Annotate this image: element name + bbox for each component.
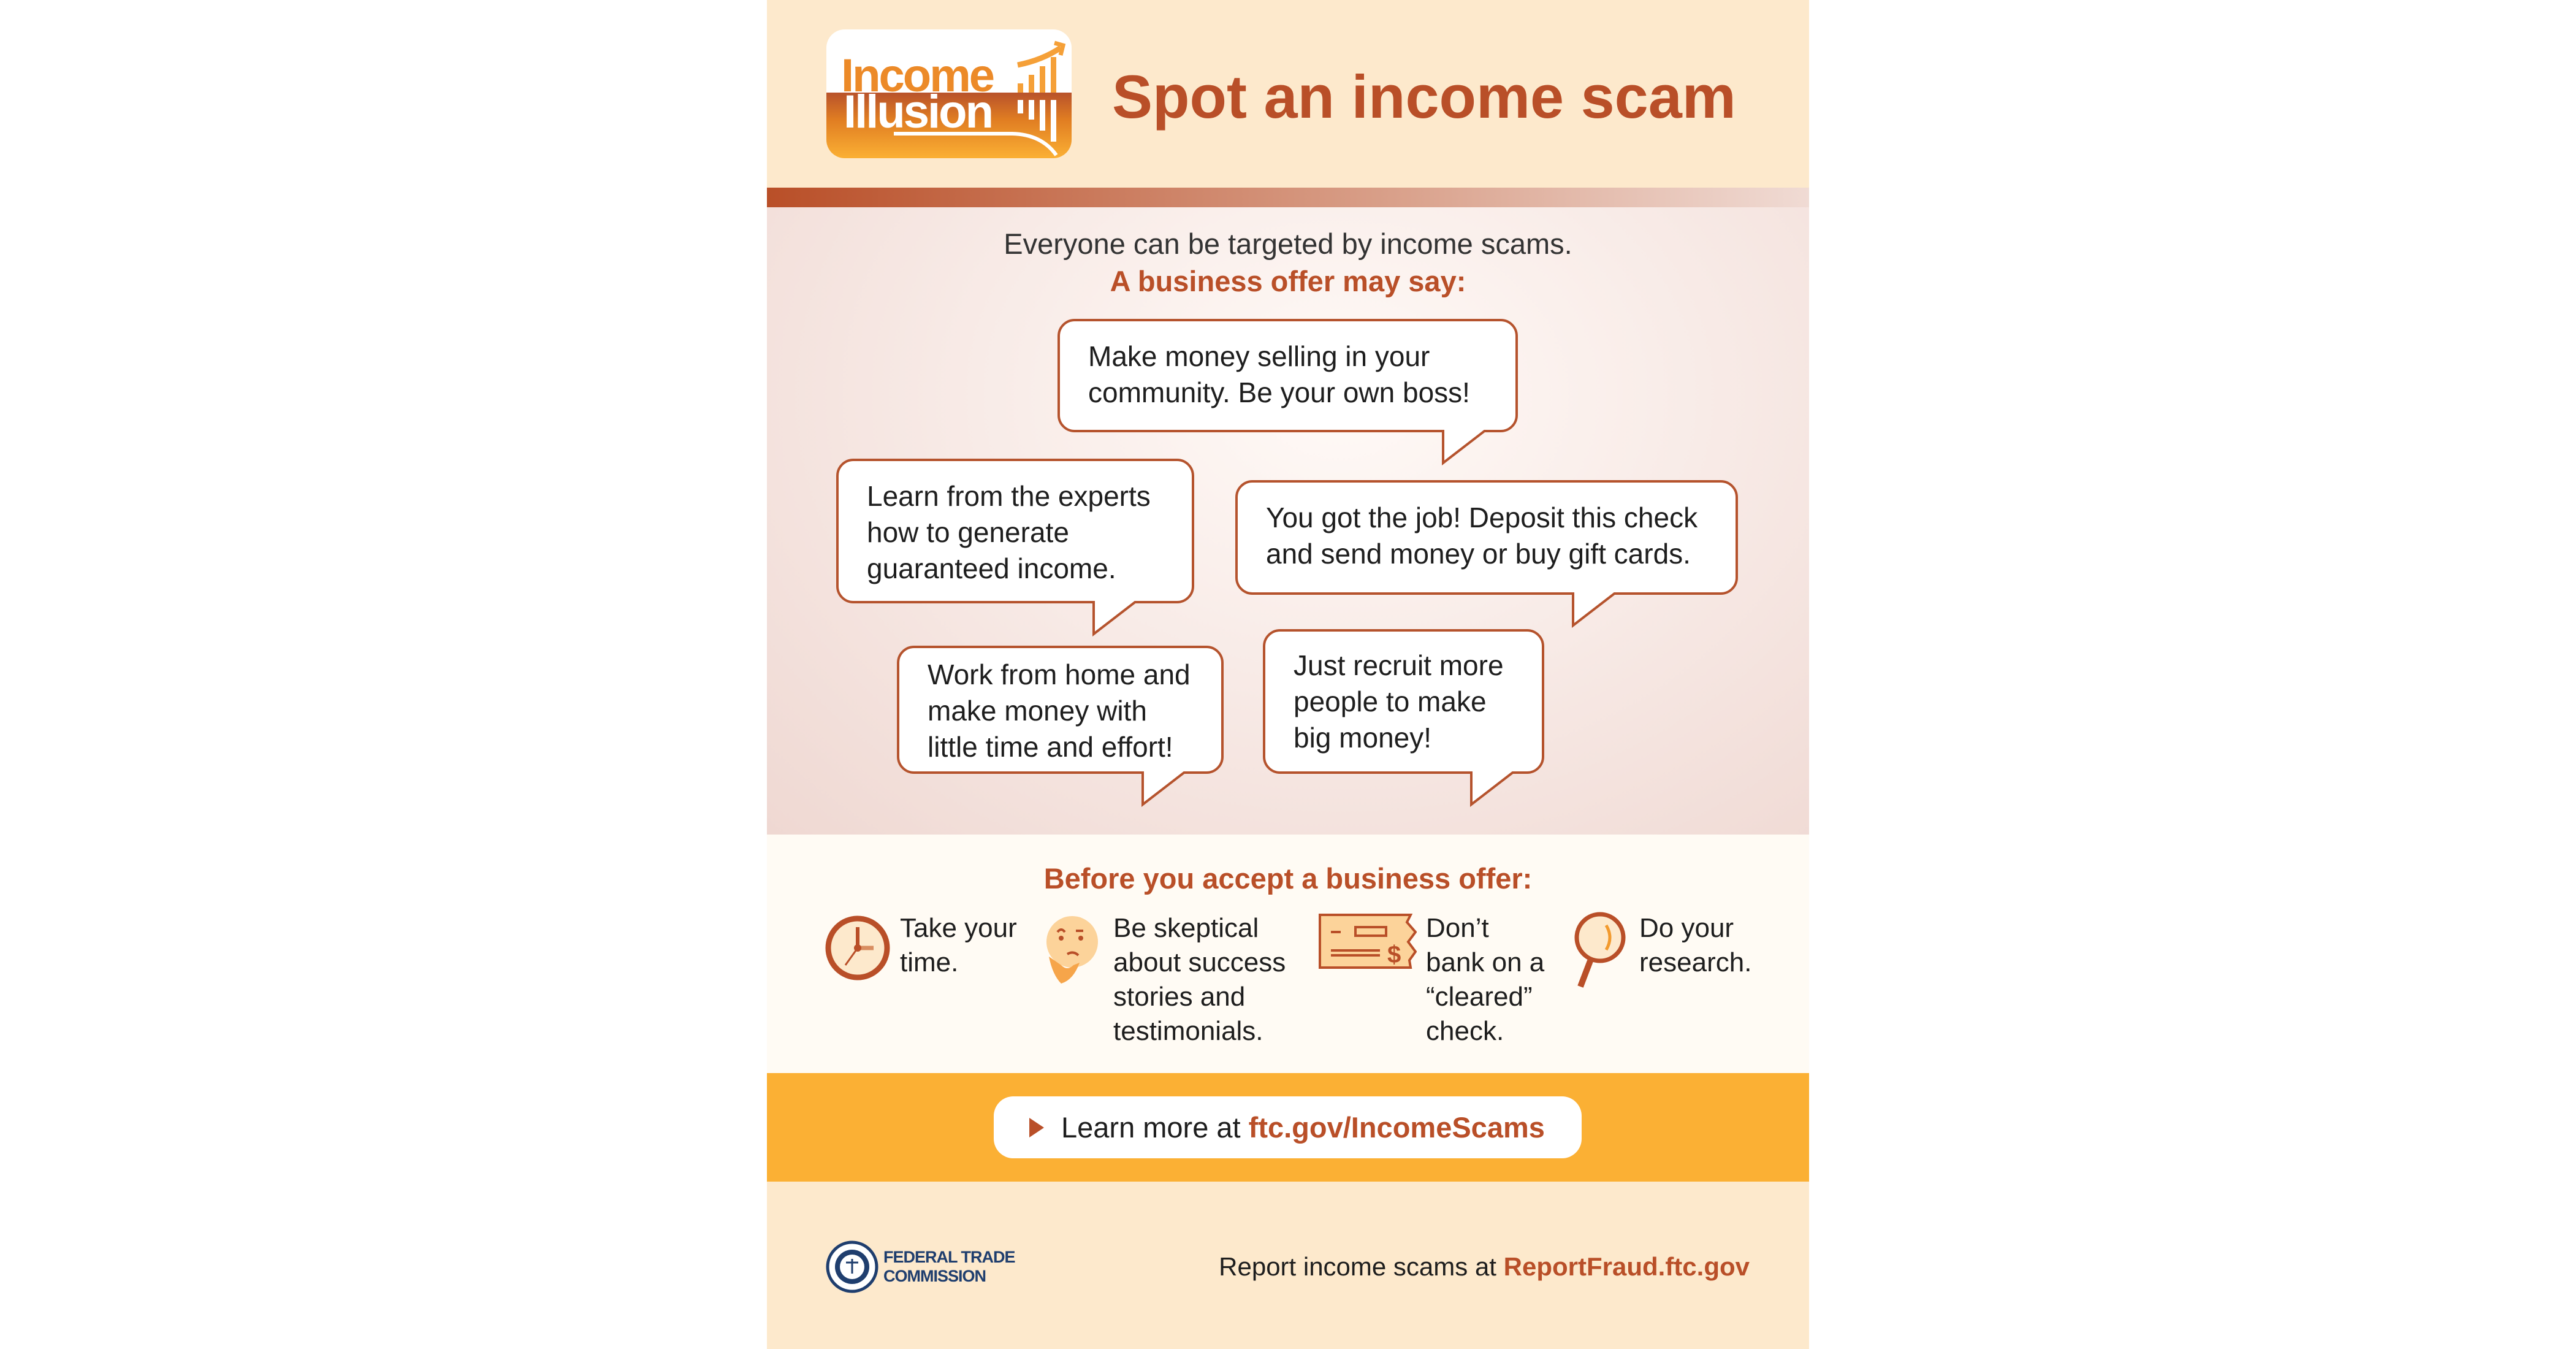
tip 1: time. — [900, 947, 958, 977]
tip 1: Take your — [900, 913, 1017, 943]
icon: magnifier — [1574, 912, 1626, 988]
tip 2: about success — [1113, 947, 1286, 977]
bubble 5: big money! — [1294, 722, 1431, 754]
tip 3: Don’t — [1426, 913, 1489, 943]
tail 1 — [1442, 430, 1485, 465]
icon: thinking face — [1046, 916, 1098, 984]
learn more button: Learn more at ftc.gov/IncomeScams — [1061, 1111, 1545, 1144]
bubble 3: and send money or buy gift cards. — [1266, 538, 1691, 570]
FTC logo: FEDERAL TRADE — [883, 1248, 1015, 1266]
intro text: A business offer may say: — [1110, 265, 1466, 297]
bubble 3 — [1235, 480, 1738, 595]
bubble 2: how to generate — [867, 516, 1069, 548]
icon: clock — [825, 916, 890, 980]
tip 2: stories and — [1113, 982, 1245, 1012]
icon: play triangle — [1029, 1118, 1044, 1137]
tail 5 — [1470, 771, 1513, 807]
bubble 2: guaranteed income. — [867, 552, 1116, 584]
tip 3 — [1426, 913, 1545, 1046]
intro text: Everyone can be targeted by income scams. — [1004, 227, 1572, 260]
bubble 4: little time and effort! — [928, 731, 1173, 763]
bubble 1: Make money selling in your — [1088, 340, 1430, 372]
icon: check: $ — [1387, 941, 1401, 968]
tip 3: check. — [1426, 1016, 1504, 1046]
bubble 5: people to make — [1294, 686, 1487, 717]
icon: check — [1319, 914, 1417, 969]
tip 3: bank on a — [1426, 947, 1544, 977]
tip 4: Do your — [1639, 913, 1734, 943]
title: Spot an income scam — [1112, 63, 1736, 131]
tip 4: research. — [1639, 947, 1751, 977]
bubble 1 — [1057, 319, 1518, 432]
bubble 1: community. Be your own boss! — [1088, 376, 1470, 408]
poster — [767, 0, 1809, 1349]
tail 2 — [1092, 601, 1135, 636]
tip 4 — [1639, 913, 1751, 977]
tip 2: testimonials. — [1113, 1016, 1263, 1046]
tail 3 — [1572, 592, 1615, 628]
bubble 4: Work from home and — [928, 659, 1191, 690]
logo: Income Illusion: Income — [841, 50, 993, 102]
FTC logo: COMMISSION — [883, 1267, 986, 1285]
gradient bar — [767, 188, 1809, 207]
tip 2 — [1113, 913, 1286, 1046]
bubble 2: Learn from the experts — [867, 480, 1151, 512]
tail 4 — [1141, 771, 1184, 807]
logo: Income Illusion — [826, 29, 1072, 158]
bubble 5: Just recruit more — [1294, 649, 1504, 681]
tip 2: Be skeptical — [1113, 913, 1259, 943]
panel: tips — [767, 835, 1809, 1073]
orange band — [767, 1073, 1809, 1182]
learn more button — [994, 1096, 1582, 1158]
footer — [767, 1182, 1809, 1349]
header — [767, 0, 1809, 188]
tips heading: Before you accept a business offer: — [1044, 862, 1532, 895]
FTC logo — [826, 1241, 1015, 1293]
bubble 5 — [1263, 629, 1544, 774]
report text: Report income scams at ReportFraud.ftc.gov — [1219, 1252, 1750, 1281]
tip 3: “cleared” — [1426, 982, 1533, 1012]
bubble 4 — [897, 646, 1224, 774]
bubble 4: make money with — [928, 695, 1147, 727]
bubble 2 — [836, 459, 1194, 603]
bubble 3: You got the job! Deposit this check — [1266, 502, 1698, 533]
tip 1 — [900, 913, 1017, 977]
intro text — [1004, 227, 1572, 297]
panel: business offers — [767, 207, 1809, 835]
